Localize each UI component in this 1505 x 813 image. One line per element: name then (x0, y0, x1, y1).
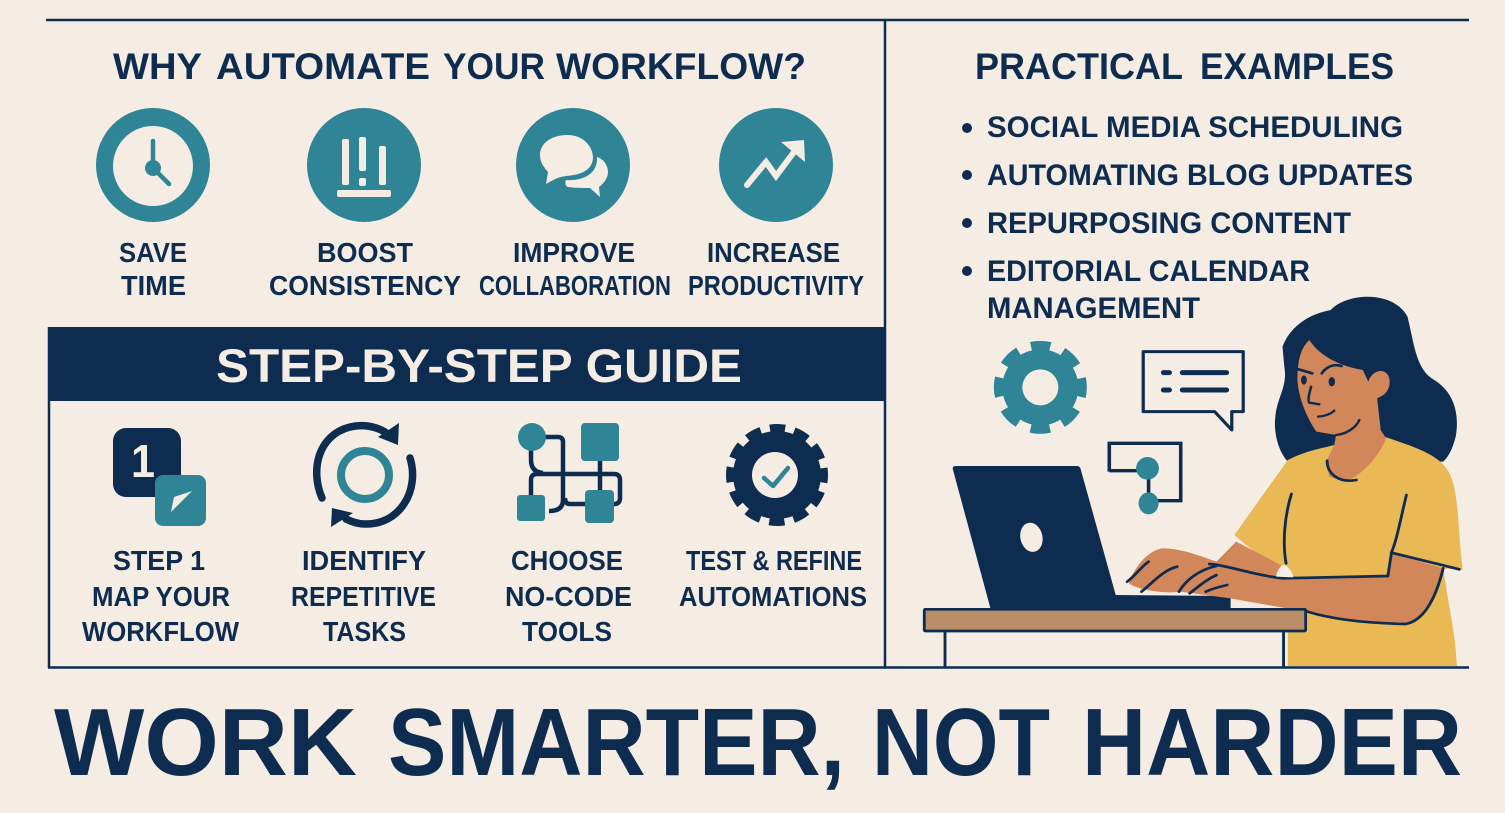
bracelet (1276, 565, 1293, 577)
label: identify repetitive tasks: IDENTIFY (302, 545, 426, 576)
icon: chat bubbles (516, 108, 630, 222)
panel: why automate (96, 46, 864, 301)
label: improve collaboration: COLLABORATION (479, 270, 671, 301)
label: step 1: STEP 1 (113, 545, 205, 576)
panel: steps (82, 423, 867, 647)
icon: growth arrow (719, 108, 833, 222)
hand redraw and finger lines (1127, 548, 1388, 609)
label: identify repetitive tasks: TASKS (323, 616, 406, 647)
list: examples: AUTOMATING BLOG UPDATES (987, 159, 1413, 192)
label: boost consistency: BOOST (317, 237, 413, 268)
label: choose no-code tools: CHOOSE (511, 545, 623, 576)
label: identify repetitive tasks: REPETITIVE (291, 581, 436, 612)
label: increase productivity: PRODUCTIVITY (688, 270, 864, 301)
label: choose no-code tools: TOOLS (522, 616, 612, 647)
icon: step one: 1 (131, 435, 155, 487)
label: save time: SAVE (119, 237, 187, 268)
title: work smarter, not harder: SMARTER, (388, 689, 845, 796)
banner: step-by-step guide: STEP-BY-STEP GUIDE (216, 339, 742, 392)
heading: why automate (113, 46, 806, 87)
label: boost consistency: CONSISTENCY (269, 270, 461, 301)
label: increase productivity: INCREASE (707, 237, 840, 268)
icon: speech bubble (1143, 352, 1243, 430)
illustration: woman at laptop (924, 297, 1463, 667)
icon: flowchart (517, 423, 620, 523)
laptop (953, 466, 1231, 609)
label: boost consistency (269, 237, 461, 301)
title: work smarter, not harder: HARDER (1082, 689, 1462, 796)
heading: why automate: AUTOMATE (216, 46, 430, 87)
face and neck (1297, 340, 1390, 482)
label: step 1 (82, 545, 240, 647)
icon: clock (96, 108, 210, 222)
list: examples: SOCIAL MEDIA SCHEDULING (987, 111, 1403, 144)
icon: mini flow (1109, 443, 1181, 514)
list: examples: EDITORIAL CALENDAR (987, 255, 1310, 288)
title: work smarter, not harder (54, 689, 1462, 796)
icon: bars (307, 108, 421, 222)
label: save time: TIME (121, 270, 186, 301)
panel: practical examples (924, 46, 1463, 667)
label: choose no-code tools: NO-CODE (505, 581, 632, 612)
heading: why automate: WORKFLOW? (556, 46, 806, 87)
list: examples: MANAGEMENT (987, 292, 1200, 325)
shirt (1234, 437, 1463, 666)
label: test and refine: AUTOMATIONS (679, 581, 867, 612)
label: test and refine (679, 545, 867, 612)
label: save time (119, 237, 187, 301)
icon: step one (113, 428, 206, 526)
label: test and refine: TEST & REFINE (686, 545, 862, 576)
icon: gear check (731, 429, 823, 521)
list: examples: REPURPOSING CONTENT (987, 207, 1351, 240)
arm and hands (1129, 542, 1443, 624)
shirt lines (1284, 461, 1459, 624)
heading: practical examples: EXAMPLES (1200, 46, 1394, 87)
heading: practical examples: PRACTICAL (975, 46, 1183, 87)
title: work smarter, not harder: NOT (872, 689, 1050, 796)
label: increase productivity (688, 237, 864, 301)
face details (1299, 365, 1359, 435)
hair (1275, 297, 1457, 462)
label: improve collaboration: IMPROVE (513, 237, 635, 268)
heading: practical examples (975, 46, 1394, 87)
label: improve collaboration (479, 237, 671, 301)
title: work smarter, not harder: WORK (54, 689, 357, 796)
icon: teal gear (999, 346, 1081, 428)
heading: why automate: WHY (113, 46, 202, 87)
laptop logo (1018, 521, 1045, 554)
icon: cycle (317, 423, 413, 527)
label: step 1: MAP YOUR (92, 581, 230, 612)
desk (924, 609, 1306, 667)
list: examples (962, 111, 1413, 325)
label: choose no-code tools (505, 545, 632, 647)
label: identify repetitive tasks (291, 545, 436, 647)
label: step 1: WORKFLOW (82, 616, 240, 647)
heading: why automate: YOUR (443, 46, 545, 87)
banner: step-by-step guide (48, 327, 885, 401)
